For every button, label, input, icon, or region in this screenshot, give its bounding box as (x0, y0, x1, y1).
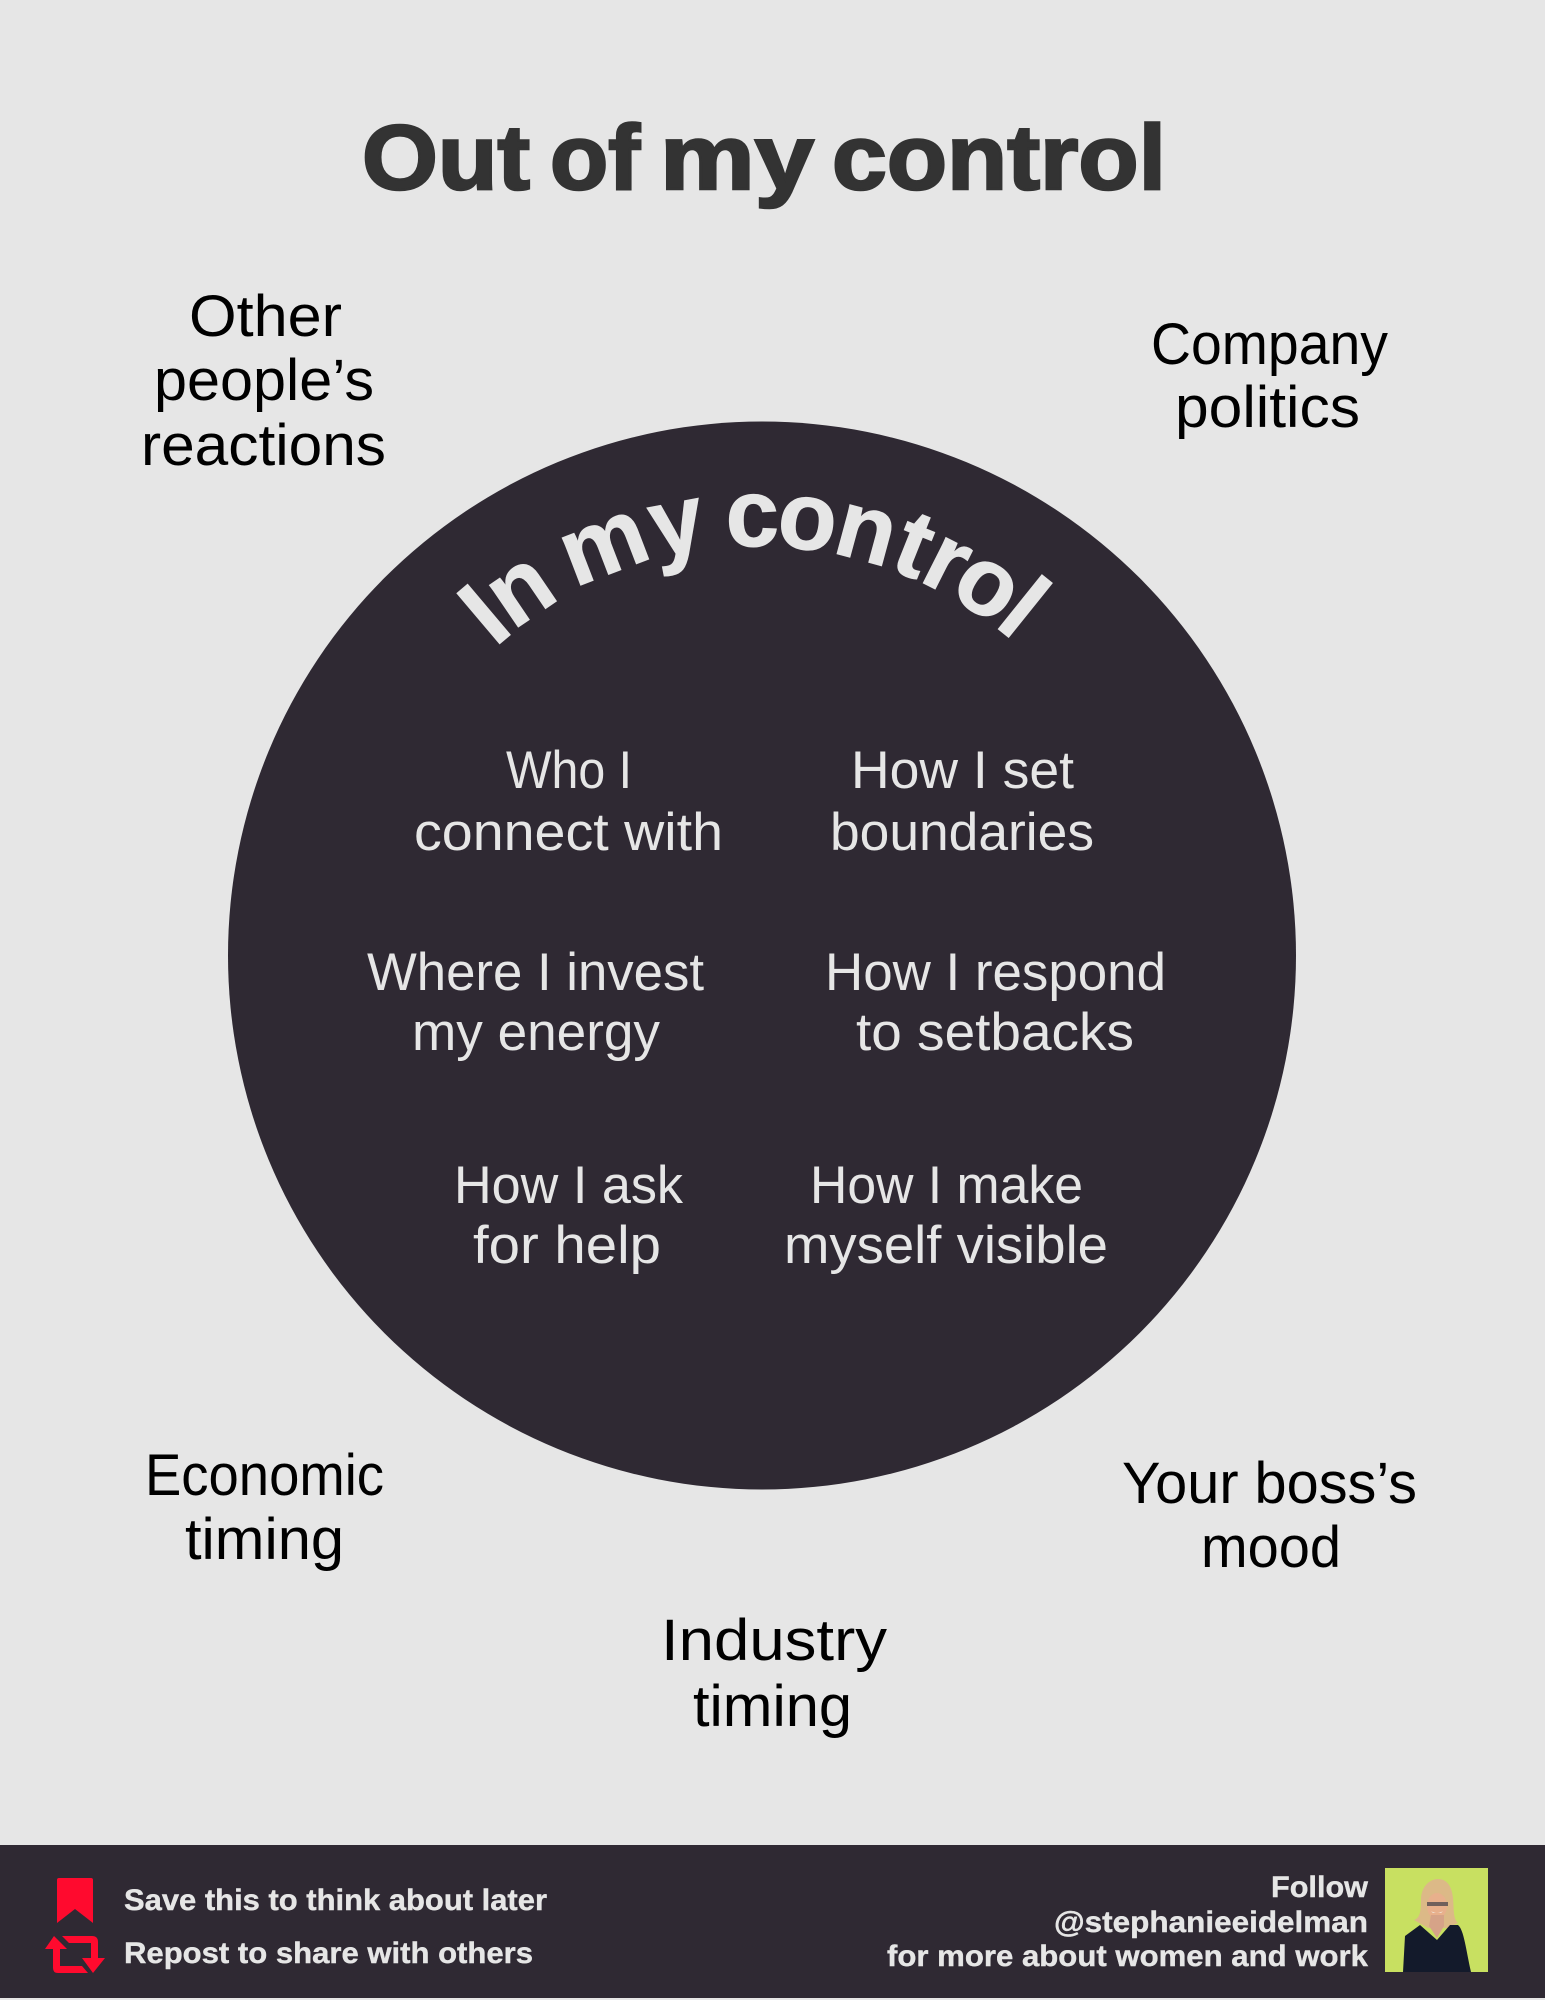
item: where I invest my energy (367, 943, 704, 1062)
label: other people's reactions: Other (189, 284, 342, 349)
text: follow (887, 1871, 1369, 1973)
item: how I ask for help: How I ask (454, 1156, 683, 1215)
item: how I set boundaries: boundaries (830, 803, 1094, 862)
label: industry timing: timing (693, 1674, 852, 1739)
item: who I connect with (414, 741, 723, 862)
panel: in my control circle (228, 422, 1296, 1490)
footer bar (0, 1845, 1545, 1998)
title: my (660, 107, 814, 209)
item: who I connect with: Who I (506, 741, 632, 800)
item: how I ask for help (454, 1156, 683, 1275)
label: other people's reactions (141, 284, 386, 478)
label: other people's reactions: people’s (154, 348, 374, 413)
photo: portrait (1385, 1868, 1488, 1972)
label: economic timing (145, 1443, 384, 1572)
item: how I make myself visible: How I make (810, 1156, 1083, 1215)
item: how I set boundaries (830, 741, 1094, 862)
label: your boss's mood: mood (1201, 1515, 1341, 1580)
label: your boss's mood (1122, 1451, 1417, 1580)
label: economic timing: Economic (145, 1443, 384, 1508)
item: how I make myself visible: myself visible (784, 1216, 1108, 1275)
label: company politics: politics (1175, 375, 1360, 440)
item: how I respond to setbacks: to setbacks (856, 1003, 1134, 1062)
label: other people's reactions: reactions (141, 413, 386, 478)
item: how I respond to setbacks: How I respond (825, 943, 1166, 1002)
title: control (832, 107, 1166, 209)
item: how I make myself visible (784, 1156, 1108, 1275)
icon: repost (45, 1936, 105, 1973)
text: follow: Follow (1271, 1871, 1369, 1904)
item: who I connect with: connect with (414, 803, 723, 862)
label: company politics: Company (1151, 312, 1388, 377)
title: of (550, 107, 640, 209)
label: company politics (1151, 312, 1388, 440)
item: how I set boundaries: How I set (851, 741, 1074, 800)
text: repost: Repost to share with others (124, 1937, 533, 1970)
heading: in my control (curved): In my control (439, 460, 1068, 664)
icon: bookmark (57, 1878, 93, 1923)
label: economic timing: timing (185, 1507, 344, 1572)
item: where I invest my energy: my energy (412, 1003, 660, 1062)
text: follow: for more about women and work (887, 1940, 1368, 1973)
text: follow: @stephanieeidelman (1054, 1906, 1368, 1939)
title (362, 107, 1166, 209)
item: how I ask for help: for help (473, 1216, 661, 1275)
item: where I invest my energy: Where I invest (367, 943, 704, 1002)
title: Out (362, 107, 530, 209)
label: industry timing (661, 1608, 887, 1739)
item: how I respond to setbacks (825, 943, 1166, 1062)
label: industry timing: Industry (661, 1608, 887, 1673)
label: your boss's mood: Your boss’s (1122, 1451, 1417, 1516)
text: save this: Save this to think about later (124, 1884, 547, 1917)
